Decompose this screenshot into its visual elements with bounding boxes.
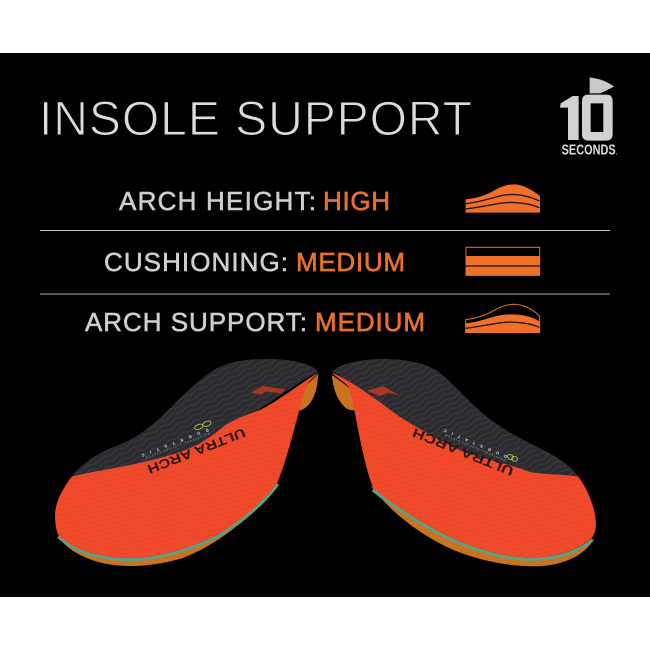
brand logo [442,427,518,466]
icon: arch height high [466,184,540,213]
icon: 10 seconds logo: SECONDS [562,143,616,159]
orange top surface [332,373,596,557]
icon: 10 seconds logo [560,77,617,159]
brand logo: METATARSAL SUPPORT SYSTEM [445,433,506,462]
green midlayer [373,490,593,559]
left insole [55,359,318,566]
insole base edge [370,485,595,566]
insole base edge [57,483,279,566]
product name: ULTRA ARCH [411,425,516,478]
icon: arch support medium [466,304,540,333]
right insole [332,359,596,566]
row: arch support: MEDIUM [315,307,425,337]
row: cushioning: CUSHIONING: [104,247,288,277]
divider [40,294,610,295]
row: arch support: ARCH SUPPORT: [85,307,307,337]
heel mark [251,386,285,395]
brand logo: DUOSTATIC [141,428,209,458]
heel cup [298,374,318,411]
black forefoot and arch top [332,359,578,477]
row: cushioning: MEDIUM [296,247,405,277]
product name: ULTRA ARCH [145,425,247,476]
green midlayer [58,484,278,560]
brand logo: DUOSTATIC [443,428,508,459]
row: arch height: ARCH HEIGHT: [119,186,316,216]
heel mark [367,386,399,396]
icon: cushioning medium [466,247,540,276]
brand logo [138,420,215,460]
brand logo: METATARSAL SUPPORT SYSTEM [145,432,210,459]
title: INSOLE SUPPORT [39,93,472,146]
heel cup [332,375,355,410]
divider [40,230,610,231]
row: arch height: HIGH [323,186,390,216]
row: cushioning [104,247,405,277]
row: arch support [85,307,425,337]
black forefoot and arch top [72,359,318,477]
orange top surface [55,373,318,558]
